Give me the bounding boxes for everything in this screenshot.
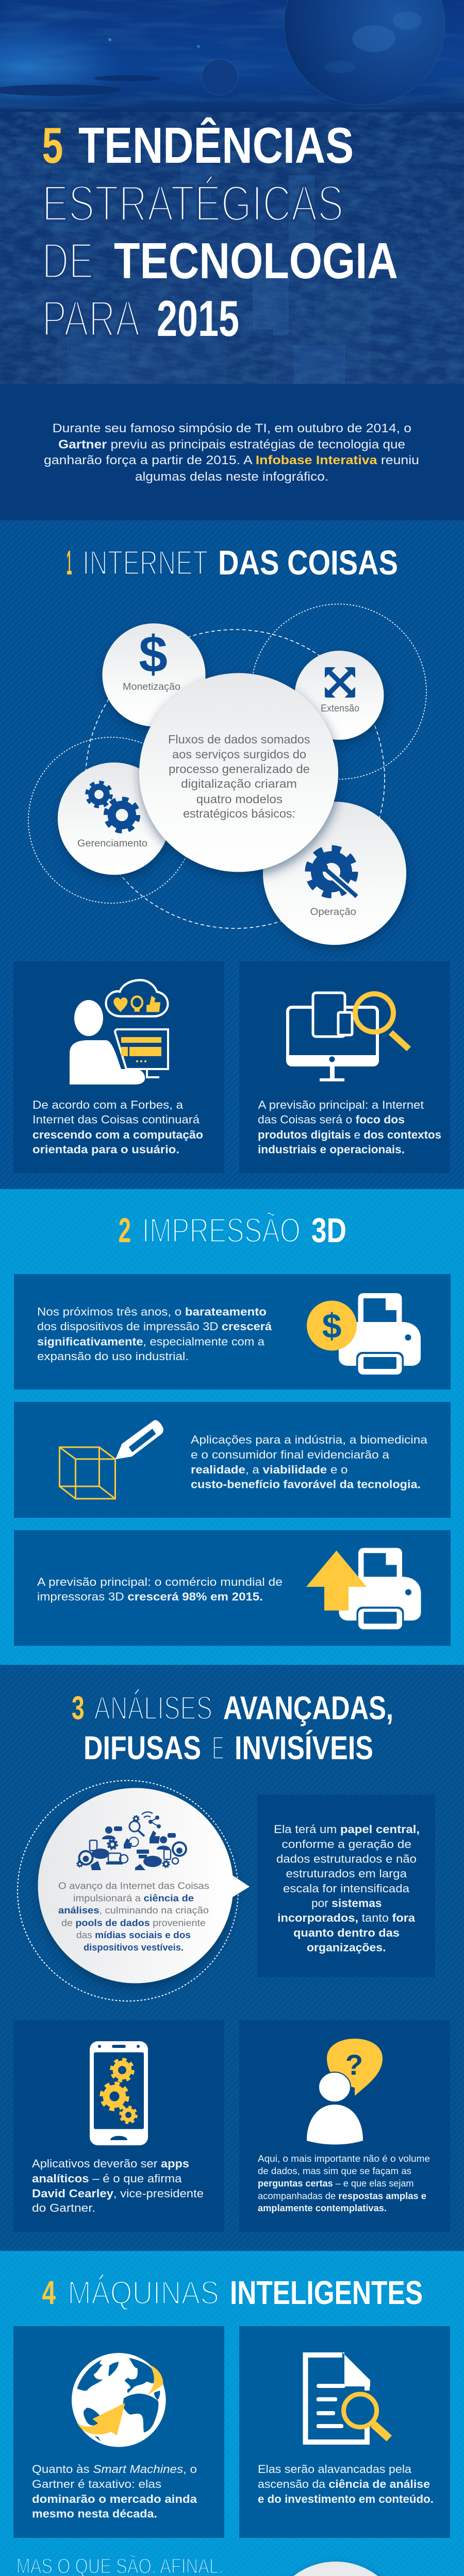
icon: user with cloud and monitor	[70, 980, 168, 1084]
heading 2: 2	[119, 1211, 131, 1250]
icon: expand arrows	[325, 667, 355, 698]
panel text: impressoras 3D crescerá 98% em 2015.	[37, 1590, 263, 1603]
panel text: organizações.	[307, 1941, 386, 1954]
panel text: significativamente , especialmente com a	[37, 1335, 264, 1348]
panel text: ascensão da ciência de análise	[258, 2478, 430, 2490]
panel text: perguntas certas – e que elas sejam	[258, 2178, 413, 2189]
heading 3: E	[212, 1730, 224, 1767]
panel: smart machines	[13, 2326, 224, 2538]
icon: person with question bubble: ?	[345, 2048, 363, 2081]
panel text: Nos próximos três anos, o barateamento	[37, 1306, 267, 1318]
panel text: das Coisas será o foco dos	[258, 1113, 405, 1126]
label: Gerenciamento	[77, 838, 147, 849]
city skyline	[0, 109, 464, 384]
panel text: dos dispositivos de impressão 3D crescerá	[37, 1320, 272, 1333]
main title: TENDÊNCIAS	[78, 117, 354, 174]
icon: printer with up arrow	[306, 1548, 421, 1630]
panel: forbes user computing	[13, 961, 224, 1173]
heading 3: INVISÍVEIS	[235, 1730, 373, 1767]
intro text: algumas delas neste infográfico.	[135, 470, 328, 484]
heading 3: AVANÇADAS,	[223, 1689, 393, 1726]
hero banner	[0, 0, 464, 384]
panel text: crescendo com a computação	[32, 1128, 203, 1141]
label: Operação	[310, 907, 356, 918]
panel: digital products focus	[239, 961, 450, 1173]
panel text	[274, 1823, 420, 1954]
panel text: amplamente contemplativas.	[258, 2202, 387, 2213]
intro text	[44, 421, 419, 484]
planet large	[284, 0, 445, 105]
heading 3: DIFUSAS	[84, 1730, 201, 1767]
central text: digitalização criaram	[181, 777, 297, 790]
section 2: impressão 3d	[0, 1189, 464, 1665]
heading 3: 3	[72, 1689, 85, 1726]
icon: cube and pencil	[60, 1420, 163, 1499]
circle: definition	[267, 2562, 404, 2576]
panel text: mesmo nesta década.	[32, 2507, 157, 2520]
panel text	[191, 1433, 428, 1491]
panel text	[32, 2157, 204, 2214]
panel text: De acordo com a Forbes, a	[32, 1098, 184, 1111]
bubble text: análises , culminando na criação	[58, 1905, 209, 1916]
panel text	[258, 2153, 430, 2213]
panel text: A previsão principal: a Internet	[258, 1098, 424, 1111]
panel text: Aqui, o mais importante não é o volume	[258, 2153, 430, 2164]
label: Extensão	[321, 703, 359, 714]
panel text: quanto dentro das	[293, 1926, 400, 1939]
bubble text: das mídias sociais e dos	[76, 1930, 191, 1940]
panel text: expansão do uso industrial.	[37, 1350, 189, 1363]
heading 1: INTERNET	[82, 544, 208, 582]
heading 3	[72, 1689, 393, 1767]
circle: gerenciamento	[58, 762, 170, 875]
intro text: Gartner previu as principais estratégias de tecnologia que	[58, 438, 405, 451]
planet small	[202, 59, 238, 95]
panel text	[258, 2463, 434, 2505]
panel text: Elas serão alavancadas pela	[258, 2463, 411, 2476]
heading 4: INTELIGENTES	[230, 2274, 423, 2311]
circle: operação	[263, 802, 406, 945]
panel: market forecast	[14, 1530, 451, 1646]
panel text: realidade , a viabilidade e o	[191, 1463, 347, 1476]
central text	[168, 733, 310, 820]
central circle	[139, 673, 338, 872]
main title	[42, 117, 398, 347]
panel text: do Gartner.	[32, 2201, 95, 2214]
central text: quatro modelos	[196, 792, 283, 806]
main title: PARA	[42, 290, 140, 347]
dashed orbit rings	[28, 604, 426, 928]
panel: content investment	[239, 2326, 450, 2538]
bubble text: impulsionará a ciência de	[73, 1893, 194, 1904]
central text: Fluxos de dados somados	[168, 733, 310, 746]
panel text: incorporados, tanto fora	[277, 1911, 415, 1924]
main title: TECNOLOGIA	[114, 232, 398, 289]
bubble text	[58, 1880, 209, 1953]
heading 4: MÁQUINAS	[68, 2274, 219, 2311]
panel text: A previsão principal: o comércio mundial de	[37, 1575, 283, 1588]
icon: printer with coin	[307, 1293, 421, 1376]
panel text	[37, 1306, 272, 1363]
intro text: Durante seu famoso simpósio de TI, em outubro de 2014, o	[53, 421, 411, 435]
central text: aos serviços surgidos do	[172, 748, 306, 761]
panel: cost reduction	[14, 1274, 451, 1389]
heading 1: DAS COISAS	[218, 544, 398, 582]
panel text: custo-benefício favorável da tecnologia.	[191, 1478, 421, 1491]
panel text: dados estruturados e não	[276, 1853, 417, 1865]
label: Monetização	[123, 682, 180, 692]
heading 2: IMPRESSÃO	[142, 1211, 301, 1250]
panel text	[32, 2463, 197, 2520]
main title: ESTRATÉGICAS	[42, 175, 343, 232]
section 1: internet das coisas	[0, 520, 464, 1189]
panel text: Gartner é taxativo: elas	[32, 2478, 161, 2490]
heading 4: 4	[42, 2274, 56, 2311]
main title: 2015	[157, 290, 239, 347]
panel text: acompanhadas de respostas amplas e	[258, 2191, 426, 2201]
panel text: escala for intensificada	[283, 1882, 410, 1895]
panel text: e do investimento em conteúdo.	[258, 2493, 434, 2505]
panel text	[32, 1098, 203, 1156]
icon: devices and magnifier	[288, 993, 409, 1081]
circle: monetização	[102, 623, 205, 726]
bubble text: de pools de dados proveniente	[61, 1918, 206, 1928]
bubble text: dispositivos vestíveis.	[84, 1942, 184, 1953]
panel: applications	[14, 1402, 451, 1518]
heading 4	[42, 2274, 423, 2311]
panel text: Aplicações para a indústria, a biomedicina	[191, 1433, 428, 1446]
panel text: de dados, mas sim que se façam as	[258, 2165, 411, 2176]
panel text: Internet das Coisas continuará	[32, 1113, 200, 1126]
panel text: Ela terá um papel central,	[274, 1823, 420, 1836]
speech bubble	[18, 1781, 250, 2001]
panel: analytic apps	[13, 2021, 224, 2232]
panel text	[258, 1098, 441, 1156]
main title: DE	[42, 232, 94, 289]
icon: phone with gears	[90, 2041, 148, 2145]
panel text: por sistemas	[311, 1897, 382, 1910]
icon: person with question bubble	[307, 2039, 383, 2144]
panel text: Quanto às Smart Machines , o	[32, 2463, 197, 2476]
central text: estratégicos básicos:	[183, 807, 295, 820]
heading 2: 3D	[311, 1211, 346, 1250]
panel text: analíticos – é o que afirma	[32, 2172, 182, 2185]
panel text: e o consumidor final evidenciarão a	[191, 1448, 390, 1461]
panel text: estruturados em larga	[286, 1867, 407, 1880]
panel text: dominarão o mercado ainda	[32, 2493, 197, 2505]
section 4: máquinas inteligentes	[0, 2251, 464, 2576]
central text: processo generalizado de	[169, 762, 310, 776]
panel text: industriais e operacionais.	[258, 1143, 405, 1156]
panel text: orientada para o usuário.	[32, 1143, 179, 1156]
heading 1: 1	[67, 544, 72, 582]
panel: central role	[257, 1795, 435, 1977]
intro text: ganharão força a partir de 2015. A Infobase Interativa reuniu	[44, 453, 419, 467]
icon: globe with arrows	[72, 2353, 166, 2447]
panel: right questions	[239, 2021, 450, 2232]
bubble text: O avanço da Internet das Coisas	[58, 1880, 209, 1891]
main title: 5	[42, 117, 63, 174]
heading 1	[67, 544, 398, 582]
panel text: conforme a geração de	[281, 1838, 411, 1851]
icon: dollar: $	[139, 625, 168, 683]
icon: printer with coin: $	[322, 1307, 341, 1346]
panel text: produtos digitais e dos contextos	[258, 1128, 441, 1141]
heading 3: ANÁLISES	[94, 1689, 212, 1726]
panel text: Aplicativos deverão ser apps	[32, 2157, 189, 2170]
panel text: David Cearley , vice-presidente	[32, 2187, 204, 2200]
intro panel	[0, 384, 464, 520]
icon: gears	[87, 783, 138, 831]
icon: social cloud	[77, 1812, 186, 1870]
icon: gear and wrench	[308, 849, 357, 896]
icon: document and magnifier	[305, 2352, 389, 2442]
section 3: análises avançadas	[0, 1665, 464, 2251]
panel text	[37, 1575, 283, 1603]
circle: extensão	[295, 651, 384, 740]
